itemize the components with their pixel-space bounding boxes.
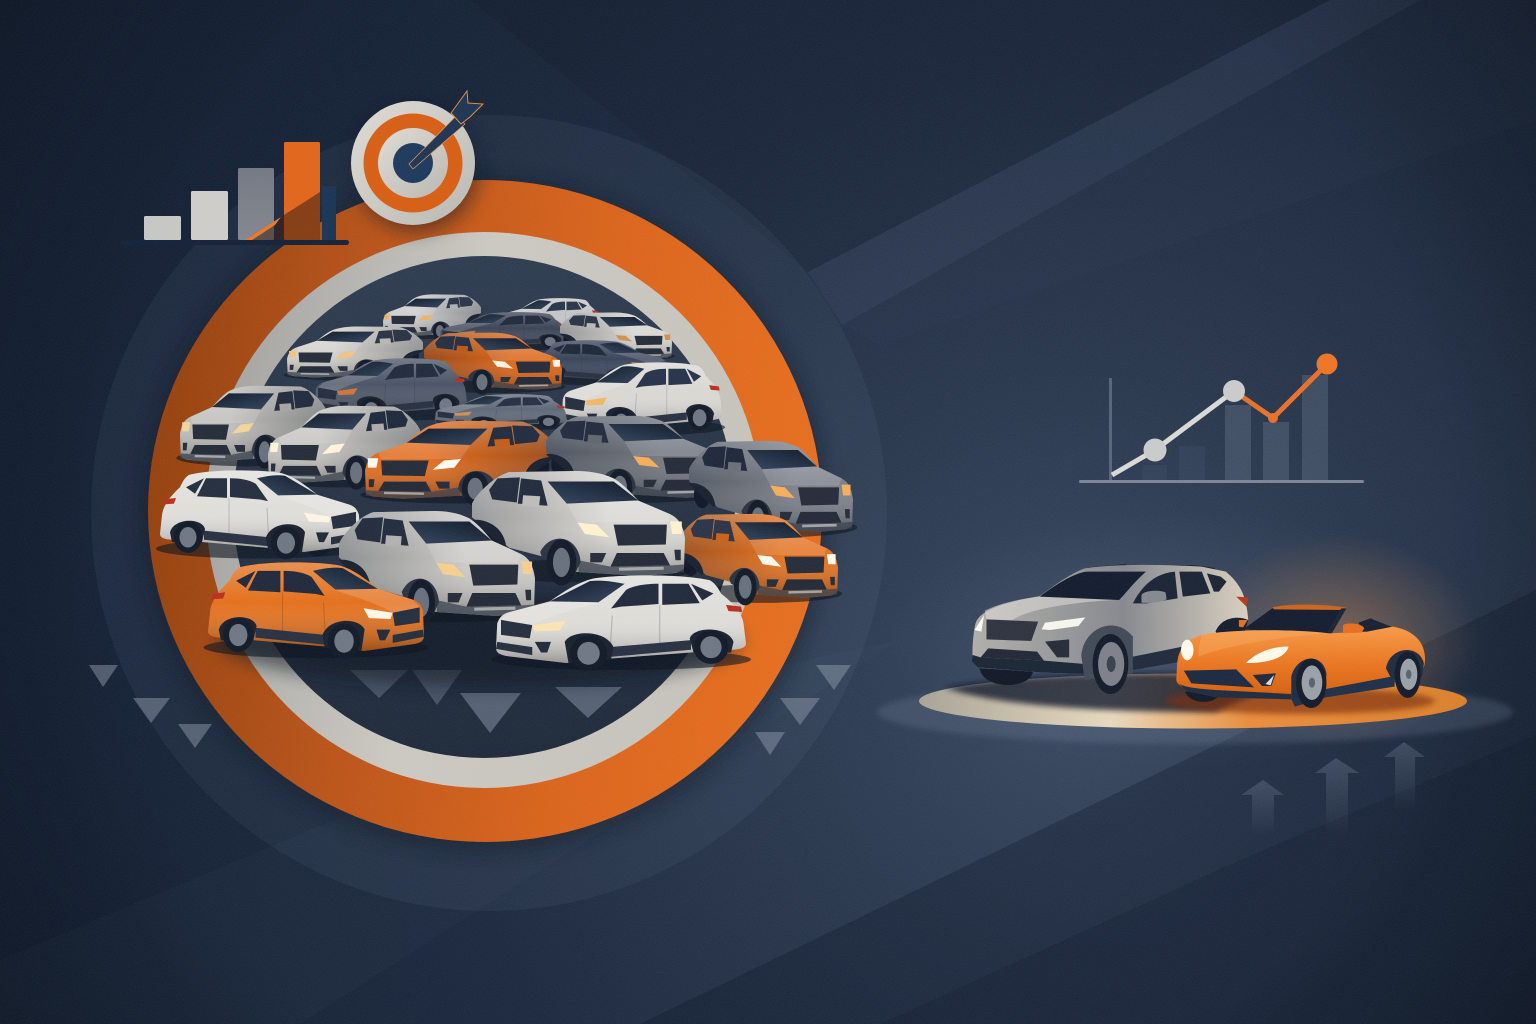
hero SUV, silver [972,564,1248,694]
icon: target with arrow [351,91,483,232]
car: second row white [284,327,423,382]
hero convertible, orange [1176,605,1425,708]
car: back row white facing right [560,312,675,363]
car: white left [176,386,326,469]
glow behind the hero cars [880,510,1500,770]
car: orange centre [360,421,555,506]
car: back row white right [498,298,602,337]
car: large white centre [472,471,690,586]
bar chart icon [120,142,349,245]
concentric target rings [141,177,829,853]
car: back row white [381,294,481,340]
car: dark third row [432,394,570,431]
car: orange front left [204,562,428,659]
spotlight platform [877,673,1513,744]
halo circle behind the rings [91,115,887,911]
car: white front right [491,575,751,671]
car: grey white [264,406,420,490]
car: grey far right [689,441,857,540]
upward arrows under the platform [1241,742,1425,835]
line chart with faded bars [1079,354,1364,483]
car: dark front of second row [312,358,470,421]
car: second row dark right [533,340,671,386]
car: orange far right [678,514,842,605]
downward triangles showing the narrowing choices [89,665,851,755]
crowd of cars inside the circle [156,294,857,685]
car: white grey centre [339,511,540,626]
car: grey centre right [546,416,726,505]
car: back row dark [437,312,571,351]
car: large white left [156,470,364,559]
car: orange back [424,333,565,395]
car: white third row [559,362,725,436]
